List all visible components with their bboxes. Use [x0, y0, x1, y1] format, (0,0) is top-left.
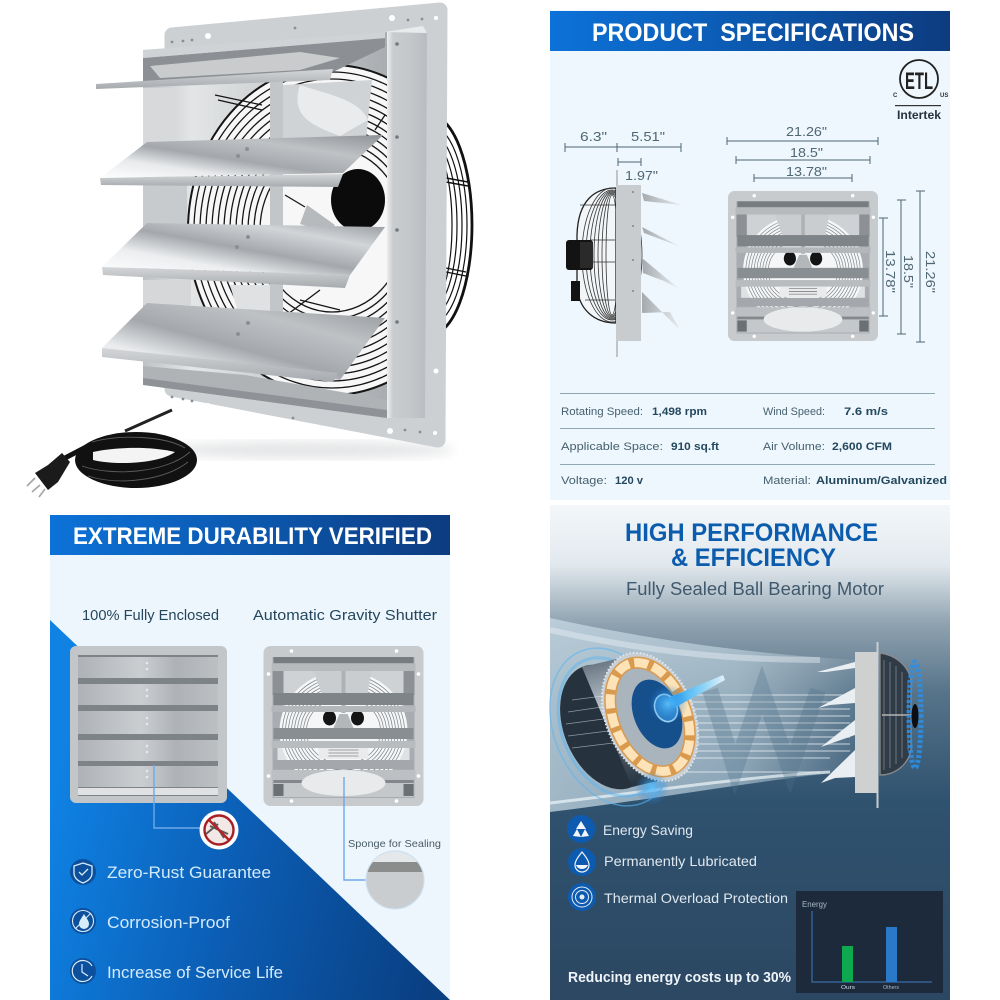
front-view height dimensions: 18.5" — [901, 255, 915, 288]
specification table: 910 sq.ft — [671, 441, 719, 453]
specification table — [560, 394, 947, 487]
closed shutter photo — [70, 646, 227, 803]
side frame — [385, 26, 427, 418]
specification table: Air Volume: — [763, 441, 825, 453]
front-view height dimensions: 13.78" — [883, 250, 897, 293]
bar chart: energy ours vs others: Energy — [802, 900, 827, 909]
louver 4 — [102, 303, 385, 382]
side-view fan — [566, 170, 682, 357]
heading: & EFFICIENCY — [671, 544, 836, 572]
specification table: Material: — [763, 475, 811, 487]
caption: fully enclosed: 100% Fully Enclosed — [82, 608, 219, 624]
bar: ours — [842, 946, 853, 982]
feature: zero-rust guarantee: Zero-Rust Guarantee — [107, 863, 271, 882]
specification table: 120 v — [615, 475, 644, 487]
callout: sponge for sealing — [344, 777, 441, 909]
side-view dimensions — [565, 130, 681, 183]
heading bar: EXTREME DURABILITY VERIFIED — [73, 523, 432, 550]
specification table: Aluminum/Galvanized — [816, 475, 947, 487]
motor illustration — [527, 629, 725, 825]
housing interior — [143, 32, 387, 418]
louver 1 — [96, 32, 385, 89]
heading bar — [50, 515, 450, 555]
feature: increase of service life: Increase of Service Life — [107, 963, 283, 982]
caption: gravity shutter: Automatic Gravity Shutter — [253, 608, 437, 624]
front-view height dimensions: 21.26" — [923, 251, 937, 293]
bar: others — [886, 927, 897, 982]
feature: thermal overload protection — [568, 883, 788, 911]
subheading: Fully Sealed Ball Bearing Motor — [626, 579, 884, 599]
feature: energy saving: Energy Saving — [603, 822, 693, 838]
louver 3 — [102, 223, 385, 288]
feature: increase of service life — [70, 958, 283, 984]
specification table: Wind Speed: — [763, 406, 825, 418]
feature: thermal overload protection: Thermal Overload Protection — [604, 890, 788, 906]
specification table: 7.6 m/s — [844, 406, 888, 418]
specification table: 2,600 CFM — [832, 441, 892, 453]
specification table: 1,498 rpm — [652, 406, 707, 418]
feature: corrosion-proof — [70, 908, 230, 934]
energy savings statement: Reducing energy costs up to 30% — [568, 969, 791, 986]
front-view fan — [728, 191, 878, 341]
side-view dimensions: 5.51" — [631, 130, 665, 144]
ETL Intertek certification mark: US — [940, 93, 948, 99]
callout: insect barrier — [154, 765, 238, 850]
mounting plate — [172, 10, 440, 440]
side-view dimensions: 6.3" — [580, 130, 607, 144]
front-view height dimensions — [879, 191, 937, 342]
rear fan guard — [388, 115, 472, 335]
ETL Intertek certification mark: C — [893, 93, 898, 99]
feature: energy saving — [567, 815, 693, 843]
feature: permanently lubricated: Permanently Lubricated — [604, 853, 757, 869]
front-view width dimensions — [727, 125, 878, 182]
heading bar — [550, 11, 950, 51]
front-view width dimensions: 18.5" — [790, 146, 823, 160]
bar chart: energy ours vs others: Ours — [841, 985, 855, 991]
ETL Intertek certification mark: ETL — [905, 68, 933, 95]
power cord and plug — [27, 410, 197, 497]
heading bar: PRODUCT SPECIFICATIONS — [592, 19, 914, 47]
specification table: Applicable Space: — [561, 441, 663, 453]
airflow stream — [550, 618, 860, 812]
side-view dimensions: 1.97" — [625, 169, 658, 183]
panel: high performance and efficiency — [527, 505, 950, 1000]
specification table: Voltage: — [561, 475, 607, 487]
open shutter photo — [264, 646, 424, 806]
front-view width dimensions: 13.78" — [786, 165, 827, 179]
fan guard and blades — [143, 65, 387, 418]
panel: main fan product photo — [27, 10, 476, 497]
feature: corrosion-proof: Corrosion-Proof — [107, 913, 230, 932]
ETL Intertek certification mark: Intertek — [897, 110, 942, 122]
front-view width dimensions: 21.26" — [786, 125, 827, 139]
louver 2 — [100, 135, 383, 187]
bar chart: energy ours vs others — [796, 891, 943, 993]
side-view fan illustration — [817, 642, 921, 808]
feature: permanently lubricated — [568, 848, 757, 876]
ETL Intertek certification mark — [893, 60, 948, 122]
feature: zero-rust guarantee — [70, 859, 271, 885]
callout: sponge for sealing: Sponge for Sealing — [348, 838, 441, 850]
panel: product specifications — [550, 10, 950, 500]
heading: HIGH PERFORMANCE — [625, 519, 878, 547]
panel: extreme durability verified — [50, 515, 450, 1000]
specification table: Rotating Speed: — [561, 406, 643, 418]
heading — [625, 519, 878, 572]
bar chart: energy ours vs others: Others — [883, 985, 899, 991]
